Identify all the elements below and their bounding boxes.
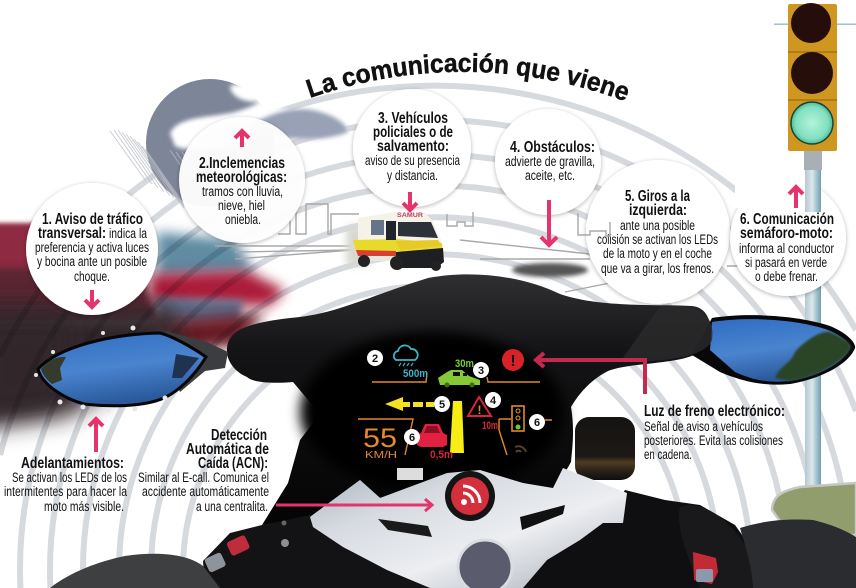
text: adelantamientos: moto más visible. (44, 499, 124, 514)
circle 2: inclemencias meteorológicas: oniebla. (225, 212, 261, 227)
blurred red car (0, 223, 285, 430)
skyline and road lines (215, 204, 747, 292)
text: luz de freno electrónico: Luz de freno electrónico: (644, 403, 785, 420)
text: adelantamientos (4, 455, 127, 514)
circle 2: inclemencias meteorológicas: nieve, hiel (218, 198, 265, 213)
circle 2: inclemencias meteorológicas: meteorológicas: (196, 169, 287, 186)
right mirror (692, 315, 855, 385)
skyline over circle 5 (578, 213, 610, 236)
dash: numbered markers (367, 350, 545, 445)
dash: speed unit: KM/H (365, 450, 397, 461)
right handlebar and glove (510, 490, 856, 588)
text: detección automática de caída (138, 427, 269, 514)
dash: weather icon (394, 345, 418, 366)
circle 4: obstáculos: 4. Obstáculos: (510, 139, 595, 156)
ambulance (346, 212, 444, 271)
circle 5: giros a la izquierda (586, 160, 730, 304)
text: detección automática de caída: accidente automáticamente (142, 484, 269, 499)
dash: red car icon (417, 424, 447, 447)
dash: numbered markers: 6 (534, 417, 540, 429)
text: adelantamientos: Se activan los LEDs de los (12, 470, 127, 485)
circle 1: aviso de tráfico transversal: y bocina ante un posible (37, 254, 147, 269)
circle 5: giros a la izquierda: 5. Giros a la (625, 188, 690, 205)
fairing overlap on right mirror (620, 306, 712, 362)
circle 1: aviso de tráfico transversal: indica la (109, 226, 147, 241)
circle 2: inclemencias meteorológicas: tramos con lluvia, (202, 184, 283, 199)
circle 1: aviso de tráfico transversal: choque. (74, 269, 110, 284)
dash: 10m label: 10m (482, 420, 498, 432)
circle 5: giros a la izquierda: colisión se activan los LEDs (597, 232, 718, 247)
text: detección automática de caída: Similar al E-call. Comunica el (138, 470, 269, 485)
dash: wifi icon (515, 446, 526, 452)
circle 1: aviso de tráfico transversal: preferencia y activa luces (35, 240, 149, 255)
circle 3: vehículos policiales o de salvamento: aviso de su presencia (365, 153, 460, 168)
text: luz de freno electrónico: en cadena. (644, 447, 692, 462)
storm cloud and rain (110, 79, 348, 208)
left mirror (34, 326, 228, 412)
ambulance: SAMUR (397, 213, 424, 219)
circle 6: comunicación semáforo-moto: semáforo-moto: (740, 225, 833, 242)
pink pointer arrows (85, 131, 803, 511)
circle 6: comunicación semáforo-moto: si pasará en verde (745, 255, 827, 270)
circle 2: inclemencias meteorológicas: 2.Inclemencias (199, 155, 285, 172)
circle 3: vehículos policiales o de salvamento: 3. Vehículos (378, 110, 448, 127)
dash: yellow turn arrow (385, 397, 434, 411)
road shadow (512, 263, 588, 277)
circle 3: vehículos policiales o de salvamento: salvamento: (377, 138, 449, 155)
text: detección automática de caída: Detección (211, 427, 267, 444)
circle 5: giros a la izquierda: ante una posible (620, 218, 695, 233)
dash: numbered markers: 4 (490, 395, 497, 407)
dash: brake warning icon: ! (510, 353, 516, 370)
circle 4: obstáculos (495, 109, 601, 215)
circle 1: aviso de tráfico transversal: transversal: (38, 225, 106, 242)
text: luz de freno electrónico: Señal de aviso a vehículos (644, 419, 763, 434)
text: luz de freno electrónico (644, 403, 785, 462)
text: detección automática de caída: Automática de (186, 441, 269, 458)
circle 4: obstáculos: aceite, etc. (525, 168, 575, 183)
circle 4: obstáculos: advierte de gravilla, (505, 154, 595, 169)
circle 1: aviso de tráfico transversal: 1. Aviso de tráfico (42, 211, 143, 228)
text: detección automática de caída: Caída (ACN): (198, 455, 268, 472)
dash: 30m label: 30m (455, 358, 474, 370)
title: La comunicación que viene (306, 52, 628, 100)
dash: orange guide lines (358, 373, 552, 455)
handlebar fairing and instrument panel (227, 274, 710, 525)
dash: numbered markers: 2 (372, 353, 378, 365)
circle 5: giros a la izquierda: izquierda: (629, 202, 687, 219)
text: detección automática de caída: a una centralita. (196, 499, 268, 514)
dash: traffic light icon (512, 406, 524, 431)
circle 1: aviso de tráfico transversal (26, 183, 158, 315)
circle 6: comunicación semáforo-moto: o debe frenar. (755, 269, 818, 284)
circle 5: giros a la izquierda: de la moto y en el coche (603, 246, 712, 261)
dash: numbered markers: 3 (478, 365, 484, 377)
dash: hazard triangle (468, 397, 491, 417)
circle 2: inclemencias meteorológicas (179, 117, 305, 243)
background green field (772, 483, 856, 535)
left handlebar and switches (50, 515, 435, 588)
dash: ambulance icon (438, 370, 480, 388)
icon: wireless crash button (445, 471, 495, 521)
dash: 500m label: 500m (403, 368, 428, 380)
dash: numbered markers: 5 (439, 399, 445, 411)
text: adelantamientos: Adelantamientos: (21, 455, 124, 472)
traffic light (774, 3, 856, 522)
dash: brake warning icon (502, 349, 524, 371)
dashboard display (358, 345, 552, 461)
circle 5: giros a la izquierda: que va a girar, los frenos. (601, 261, 714, 276)
dash: distance label: 0,5m (430, 449, 453, 461)
dash: lane bar (450, 401, 464, 453)
circle 6: comunicación semáforo-moto (730, 170, 846, 296)
circle 3: vehículos policiales o de salvamento: y distancia. (387, 168, 438, 183)
reservoir cap (575, 417, 635, 480)
text: luz de freno electrónico: posteriores. Evita las colisiones (644, 433, 783, 448)
circle 3: vehículos policiales o de salvamento (353, 89, 471, 207)
circle 3: vehículos policiales o de salvamento: policiales o de (373, 124, 453, 141)
text: adelantamientos: intermitentes para hacer la (4, 484, 127, 499)
dash: speed value: 55 (363, 423, 397, 453)
sticker (397, 468, 423, 480)
dash: hazard triangle: ! (478, 403, 482, 417)
dash: numbered markers: 6 (409, 432, 415, 444)
silver triple clamp (310, 468, 627, 588)
